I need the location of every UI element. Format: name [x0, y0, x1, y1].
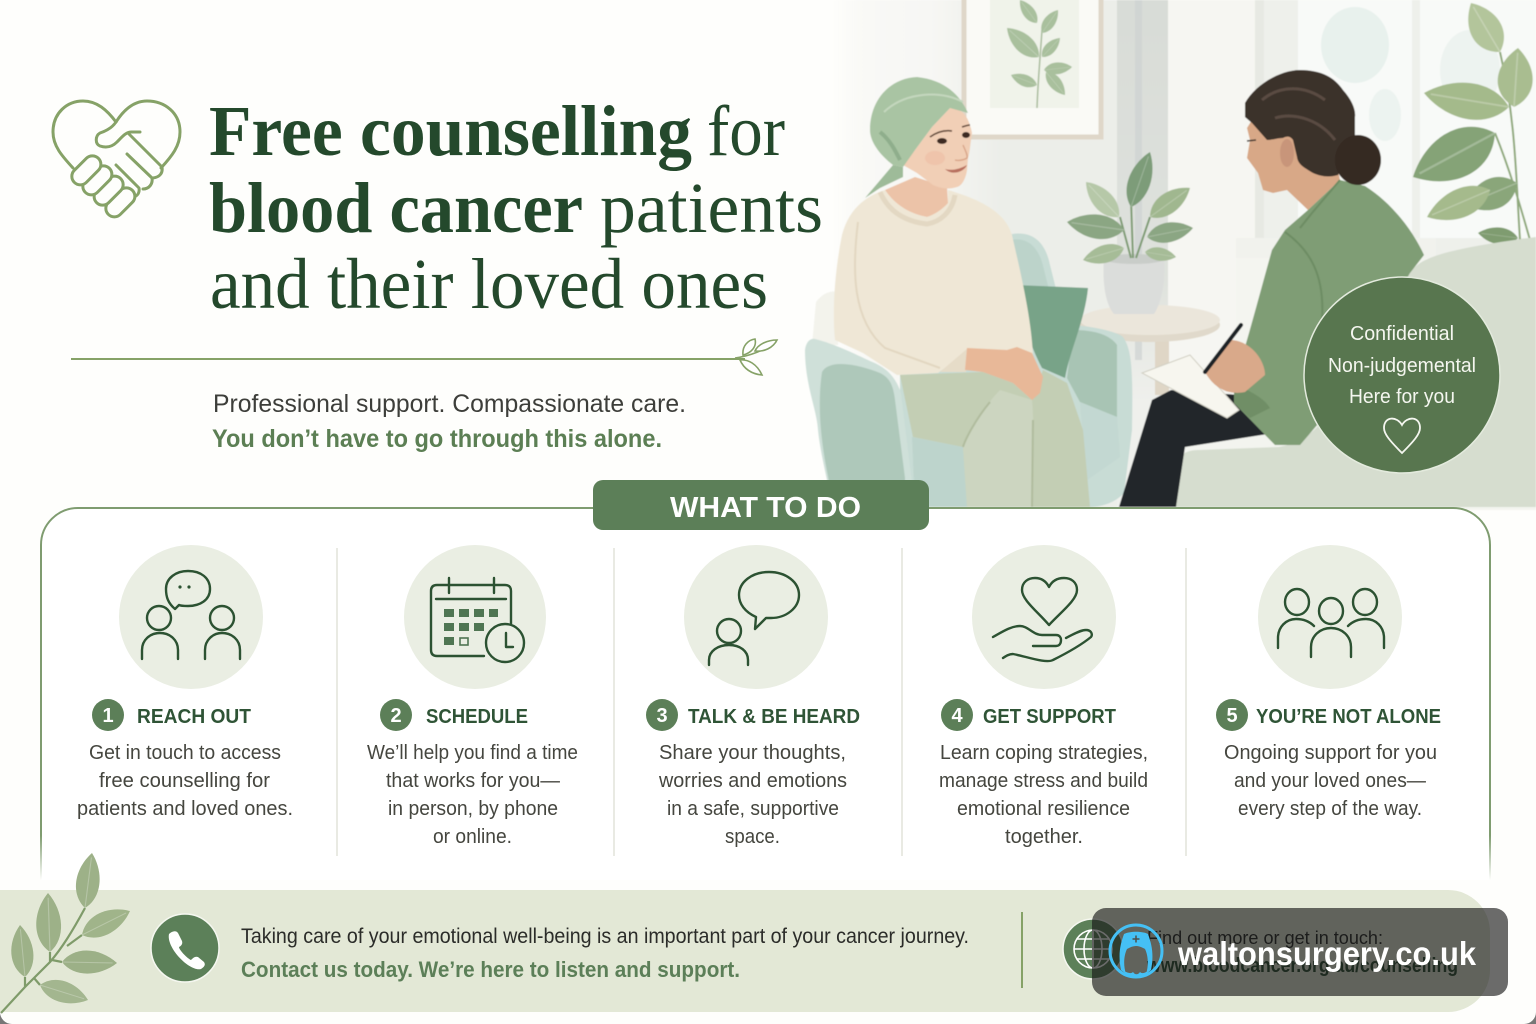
- icon: heart handshake: [53, 101, 180, 220]
- footer leaf sprig: [1, 851, 135, 1013]
- icon: heart in open hand: [972, 545, 1116, 689]
- step number: 3: [656, 705, 668, 727]
- step number: [646, 699, 678, 731]
- step 5: you're not alone: [1216, 545, 1441, 820]
- notepad: [1142, 355, 1239, 418]
- step number: 1: [102, 705, 114, 727]
- step 3: talk and be heard: [646, 545, 860, 848]
- step text: space.: [725, 826, 780, 848]
- contact details: [1146, 928, 1458, 977]
- hands: [965, 347, 1043, 400]
- step text: [939, 742, 1148, 848]
- room wall: [830, 0, 1536, 510]
- step 4: get support: [939, 545, 1148, 848]
- step text: free counselling for: [99, 770, 270, 792]
- icon: three people: [1258, 545, 1402, 689]
- step number: [92, 699, 124, 731]
- step heading: YOU’RE NOT ALONE: [1256, 706, 1441, 728]
- step number: 2: [390, 705, 402, 727]
- step number: 5: [1226, 705, 1238, 727]
- step 1: reach out: [77, 545, 293, 820]
- footer message: [241, 925, 969, 982]
- panel: what to do: [41, 508, 1490, 880]
- step text: patients and loved ones.: [77, 798, 293, 820]
- hair bun: [1335, 135, 1381, 185]
- sweater: [834, 190, 1033, 375]
- step text: [367, 742, 578, 848]
- step number: 4: [951, 705, 963, 727]
- contact details: Find out more or get in touch:: [1147, 928, 1383, 948]
- step text: and your loved ones—: [1234, 770, 1426, 792]
- neck: [885, 177, 948, 217]
- curtain pillar: [1117, 0, 1168, 400]
- step text: every step of the way.: [1238, 798, 1422, 820]
- step text: [658, 742, 847, 848]
- watermark: waltonsurgery.co.uk: [1177, 935, 1477, 972]
- step text: worries and emotions: [658, 770, 847, 792]
- writing hand and pen: [1205, 340, 1265, 393]
- footer message: Taking care of your emotional well-being is an important part of your cancer journey.: [241, 925, 969, 948]
- step text: or online.: [433, 826, 512, 848]
- image corner marks: [0, 1012, 1536, 1024]
- icon: calendar and clock: [404, 545, 546, 689]
- title divider with sprig: [71, 339, 777, 375]
- ear and eye: [1247, 139, 1294, 167]
- badge: confidential: Non-judgemental: [1328, 355, 1476, 377]
- icon: two people talking: [119, 545, 263, 689]
- counsellor chair: [1176, 237, 1536, 507]
- step heading: SCHEDULE: [426, 706, 528, 728]
- framed botanical picture: [964, 0, 1101, 137]
- watermark: [1092, 908, 1508, 996]
- step text: in person, by phone: [388, 798, 558, 820]
- contact details: www.bloodcancer.org.au/counselling: [1146, 955, 1458, 977]
- step text: We’ll help you find a time: [367, 742, 578, 764]
- title: for: [707, 91, 785, 171]
- counsellor figure: [1119, 70, 1424, 507]
- what to do banner: [593, 480, 929, 530]
- facial features: [925, 125, 970, 173]
- patient figure: [834, 77, 1090, 507]
- what to do banner: WHAT TO DO: [670, 492, 861, 524]
- icon: globe: [1063, 919, 1123, 979]
- title: blood cancer: [209, 168, 583, 248]
- icon: person with speech bubble: [684, 545, 828, 689]
- potted plant: [1065, 148, 1196, 314]
- step text: Get in touch to access: [89, 742, 281, 764]
- step heading: GET SUPPORT: [983, 706, 1116, 728]
- right window plant: [1402, 0, 1535, 247]
- footer band: [0, 890, 1490, 1012]
- step 2: schedule: [367, 545, 578, 848]
- neck and face: [1247, 115, 1340, 210]
- hair: [1245, 70, 1355, 176]
- step number: [1216, 699, 1248, 731]
- step heading: REACH OUT: [137, 706, 251, 728]
- subtitle: [212, 390, 686, 453]
- step text: [77, 742, 293, 820]
- title: Free counselling: [209, 91, 692, 171]
- subtitle: You don’t have to go through this alone.: [212, 425, 662, 453]
- trousers: [900, 370, 1090, 507]
- title: and their loved ones: [210, 244, 768, 324]
- window: [1168, 0, 1536, 430]
- step text: manage stress and build: [939, 770, 1148, 792]
- step text: Share your thoughts,: [659, 742, 846, 764]
- column dividers: [337, 548, 1186, 856]
- step text: in a safe, supportive: [667, 798, 839, 820]
- illustration: counselling room scene: [805, 0, 1536, 510]
- footer message: Contact us today. We’re here to listen and support.: [241, 957, 740, 982]
- side table: [1080, 305, 1220, 395]
- step number: [380, 699, 412, 731]
- title: [209, 91, 823, 324]
- step number: [941, 699, 973, 731]
- subtitle: Professional support. Compassionate care.: [213, 390, 686, 418]
- step heading: TALK & BE HEARD: [688, 706, 860, 728]
- face: [903, 108, 972, 188]
- step text: emotional resilience: [957, 798, 1130, 820]
- green jacket: [1234, 180, 1424, 445]
- headscarf: [865, 77, 968, 198]
- badge: confidential: Confidential: [1350, 323, 1454, 345]
- icon: phone: [151, 914, 219, 982]
- dark trousers: [1119, 390, 1274, 507]
- badge: confidential: [1304, 277, 1500, 473]
- step text: together.: [1005, 826, 1083, 848]
- step text: that works for you—: [386, 770, 560, 792]
- step text: [1224, 742, 1437, 820]
- badge: confidential: Here for you: [1349, 386, 1455, 408]
- title: patients: [600, 168, 823, 248]
- step text: Ongoing support for you: [1224, 742, 1437, 764]
- patient armchair: [805, 234, 1132, 507]
- step text: Learn coping strategies,: [940, 742, 1148, 764]
